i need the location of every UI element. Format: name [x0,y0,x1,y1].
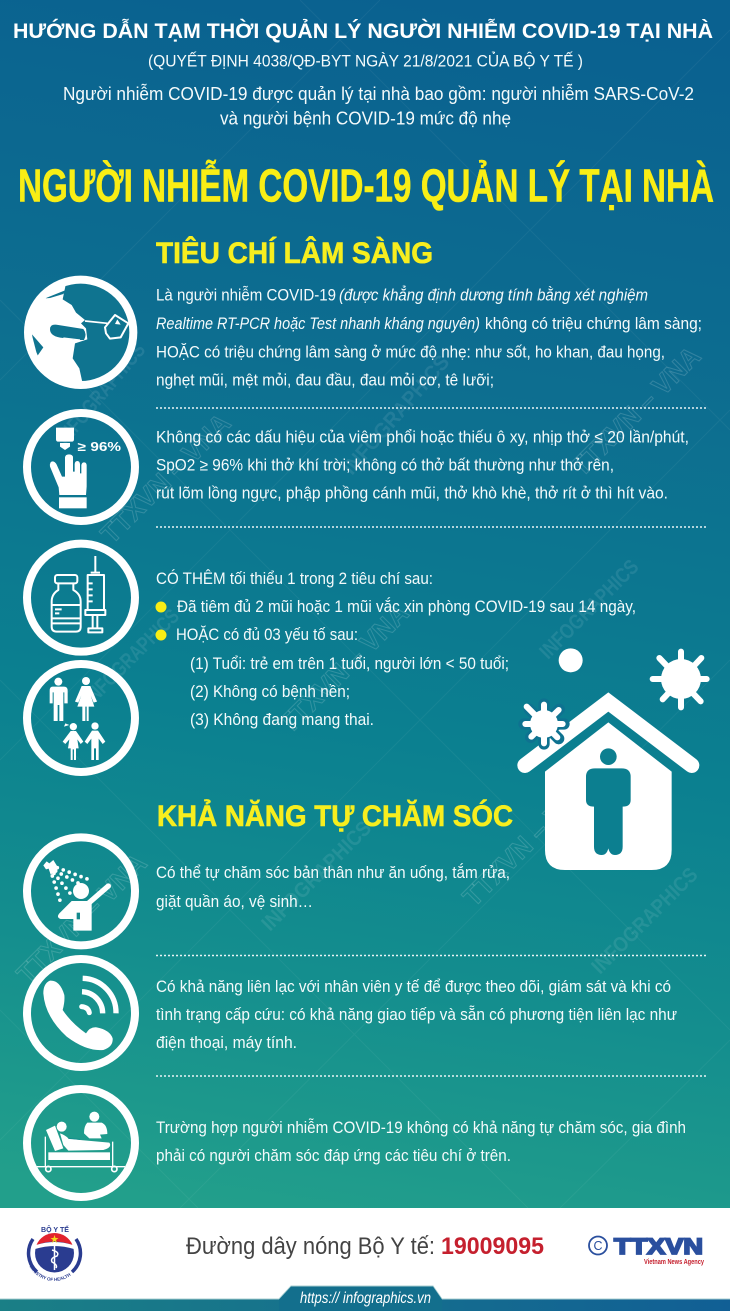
watermarks: INFOGRAPHICS [587,863,703,979]
hotline text: 19009095 [441,1233,544,1260]
icon: house with person and viruses [524,648,707,870]
panel: communication text [156,978,677,1052]
panel: self-care text [156,863,510,911]
icon: SpO2 96% fingertip [27,413,135,521]
watermarks: TTXVN – VNA [11,848,152,989]
panel: respiratory criteria text: rút lõm lồng ngực, phập phồng cánh mũi, thở khò khè, thở rít ở thì hít vào. [156,484,668,502]
watermarks: INFOGRAPHICS [257,817,376,936]
section heading: self-care ability: KHẢ NĂNG TỰ CHĂM SÓC [157,799,513,833]
panel: additional criteria text: (2) Không có bệnh nền; [190,683,350,701]
panel: self-care text: Có thể tự chăm sóc bản thân như ăn uống, tắm rửa, [156,863,510,882]
panel: caregiver note text [156,1118,686,1165]
watermarks: TTXVN – VNA [95,408,236,549]
intro text: và người bệnh COVID-19 mức độ nhẹ [220,108,511,128]
panel: additional criteria text: HOẶC có đủ 03 yếu tố sau: [176,625,358,644]
intro text [63,83,694,128]
icon: nasal swab test [24,276,140,389]
panel: communication text: tình trạng cấp cứu: có khả năng giao tiếp và sẵn có phương tiện liên lạc như [156,1005,677,1024]
logo: TTXVN: Vietnam News Agency [644,1259,704,1266]
panel: additional criteria text: (1) Tuổi: trẻ em trên 1 tuổi, người lớn < 50 tuổi; [190,655,509,673]
icon: caregiver at patient bed [27,1089,135,1197]
watermarks: TTXVN – VNA [457,771,598,912]
watermarks: TTXVN – VNA [565,341,706,482]
icon: SpO2 96% fingertip: ≥ 96% [78,440,121,454]
panel: symptoms text: Realtime RT-PCR hoặc Test nhanh kháng nguyên) [156,315,480,333]
logo: Ministry of Health: MINISTRY OF HEALTH [30,1266,71,1281]
watermarks [11,339,706,989]
bottom band with website tab [0,1286,730,1311]
panel: communication text: điện thoại, máy tính. [156,1034,297,1052]
panel: additional criteria text: Đã tiêm đủ 2 mũi hoặc 1 mũi vắc xin phòng COVID-19 sau 14 ngày, [177,597,636,616]
website url: https:// infographics.vn [300,1290,431,1307]
panel: respiratory criteria text: Không có các dấu hiệu của viêm phổi hoặc thiếu ô xy, nhịp thở ≤ 20 lần/phút, [156,428,689,446]
panel: communication text: Có khả năng liên lạc với nhân viên y tế để được theo dõi, giám sát và khi có [156,978,671,996]
panel: symptoms text: (được khẳng định dương tính bằng xét nghiệm [339,286,648,304]
footer panel [26,1224,704,1281]
panel: additional criteria text [156,569,636,729]
icon: person showering [27,837,135,945]
icon: telephone with signal [27,959,135,1067]
logo: TTXVN: TTXVN [614,1234,703,1259]
icon: family adults and children [27,664,135,772]
logo: Ministry of Health [26,1224,82,1281]
icon: vaccine vial and syringe [27,544,135,652]
section heading: clinical criteria: TIÊU CHÍ LÂM SÀNG [156,236,433,270]
panel: symptoms text: nghẹt mũi, mệt mỏi, đau đầu, đau mỏi cơ, tê lưỡi; [156,372,494,390]
panel: additional criteria text: CÓ THÊM tối thiểu 1 trong 2 tiêu chí sau: [156,569,433,588]
panel: symptoms text: HOẶC có triệu chứng lâm sàng ở mức độ nhẹ: như sốt, ho khan, đau họng, [156,342,665,362]
title: HƯỚNG DẪN TẠM THỜI QUẢN LÝ NGƯỜI NHIỄM COVID-19 TẠI NHÀ [13,19,713,43]
panel: respiratory criteria text: SpO2 ≥ 96% khi thở khí trời; không có thở bất thường như thở rên, [156,456,614,474]
panel: caregiver note text: Trường hợp người nhiễm COVID-19 không có khả năng tự chăm sóc, gia đình [156,1118,686,1137]
logo: Ministry of Health: BỘ Y TẾ [41,1224,69,1234]
panel: symptoms text: Là người nhiễm COVID-19 [156,286,336,304]
watermarks: INFOGRAPHICS [338,351,454,479]
watermarks: INFOGRAPHICS [79,605,184,710]
watermarks: INFOGRAPHICS [535,555,643,664]
logo: TTXVN [589,1234,704,1266]
panel: symptoms text: không có triệu chứng lâm sàng; [485,315,702,333]
panel: caregiver note text: phải có người chăm sóc đáp ứng các tiêu chí ở trên. [156,1147,511,1165]
panel: respiratory criteria text [156,428,689,502]
panel: self-care text: giặt quần áo, vệ sinh… [156,893,313,911]
hotline text: Đường dây nóng Bộ Y tế: [186,1233,435,1260]
subtitle: decision reference: (QUYẾT ĐỊNH 4038/QĐ-BYT NGÀY 21/8/2021 CỦA BỘ Y TẾ ) [148,52,583,70]
panel: symptoms text [156,286,702,390]
intro text: Người nhiễm COVID-19 được quản lý tại nhà bao gồm: người nhiễm SARS-CoV-2 [63,83,694,104]
watermarks: TTXVN – VNA [273,598,414,739]
panel: additional criteria text: (3) Không đang mang thai. [190,711,374,729]
logo: TTXVN: C [594,1238,602,1253]
watermarks: INFOGRAPHICS [52,339,150,449]
